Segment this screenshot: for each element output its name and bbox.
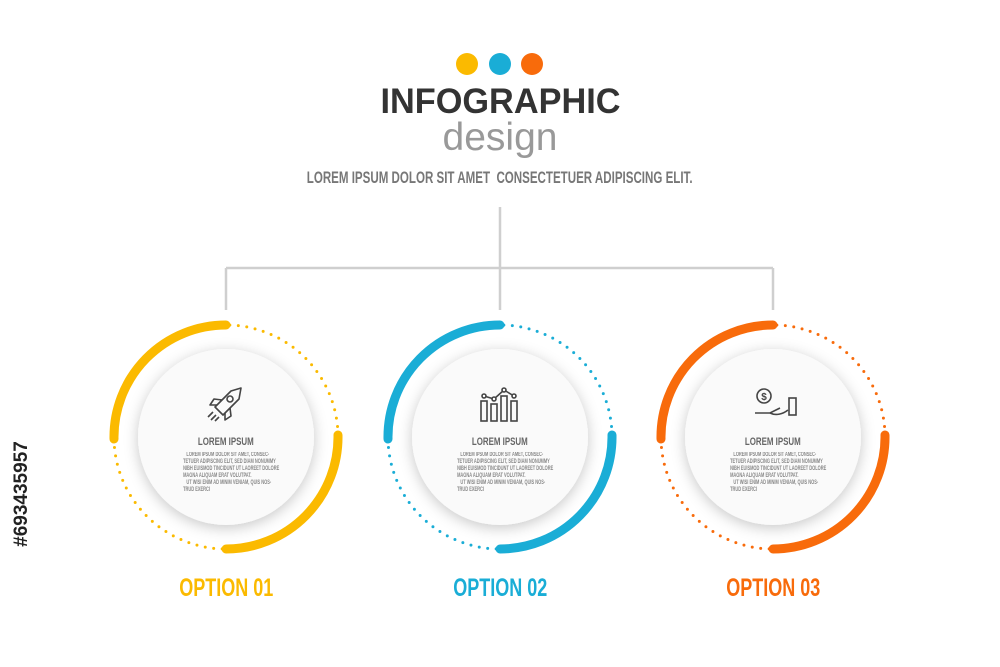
panel text 1: UT WISI ENIM AD MINIM VENIAM, QUIS NOS-	[186, 480, 271, 486]
option 2 label: OPTION 02	[453, 574, 547, 602]
icon: money hand	[755, 389, 796, 415]
panel text 2: LOREM IPSUM DOLOR SIT AMET, CONSEC-	[460, 452, 543, 458]
panel text 2: TRUD EXERCI	[457, 487, 484, 493]
panel text 1: LOREM IPSUM	[198, 436, 254, 448]
ring 1	[114, 325, 338, 549]
panel text 2: LOREM IPSUM	[472, 436, 528, 448]
panel text 3: TETUER ADIPISCING ELIT, SED DIAM NONUMMY	[730, 459, 823, 465]
ring 2	[388, 325, 612, 549]
panel text 3: LOREM IPSUM DOLOR SIT AMET, CONSEC-	[733, 452, 816, 458]
panel text 3	[730, 436, 826, 493]
panel text 3: TRUD EXERCI	[730, 487, 757, 493]
watermark id: #693435957	[11, 441, 32, 547]
panel text 2: NIBH EUISMOD TINCIDUNT UT LAOREET DOLORE	[457, 466, 553, 472]
icon: bar chart	[481, 388, 517, 421]
color dots	[456, 53, 543, 75]
panel text 3: LOREM IPSUM	[745, 436, 801, 448]
panel text 1: TRUD EXERCI	[183, 487, 210, 493]
panel text 3: MAGNA ALIQUAM ERAT VOLUTPAT.	[730, 473, 798, 479]
icon: rocket	[208, 388, 241, 421]
panel text 1: LOREM IPSUM DOLOR SIT AMET, CONSEC-	[186, 452, 269, 458]
option 3 label: OPTION 03	[726, 574, 820, 602]
panel text 3: NIBH EUISMOD TINCIDUNT UT LAOREET DOLORE	[730, 466, 826, 472]
subtitle design: design	[443, 116, 557, 159]
icon: money hand: $	[761, 392, 767, 403]
panel text 3: UT WISI ENIM AD MINIM VENIAM, QUIS NOS-	[733, 480, 818, 486]
panel text 2	[457, 436, 554, 493]
panel text 2: TETUER ADIPISCING ELIT, SED DIAM NONUMMY	[457, 459, 550, 465]
panel text 1: NIBH EUISMOD TINCIDUNT UT LAOREET DOLORE	[183, 466, 279, 472]
panel text 2: UT WISI ENIM AD MINIM VENIAM, QUIS NOS-	[460, 480, 545, 486]
panel text 1: MAGNA ALIQUAM ERAT VOLUTPAT.	[183, 473, 251, 479]
panel text 1: TETUER ADIPISCING ELIT, SED DIAM NONUMMY	[183, 459, 276, 465]
panel text 1	[183, 436, 280, 493]
title: INFOGRAPHIC	[380, 82, 620, 121]
option 1 label: OPTION 01	[179, 574, 273, 602]
ring 3	[661, 325, 885, 549]
tagline: LOREM IPSUM DOLOR SIT AMET CONSECTETUER ADIPISCING ELIT.	[307, 168, 693, 187]
panel text 2: MAGNA ALIQUAM ERAT VOLUTPAT.	[457, 473, 525, 479]
